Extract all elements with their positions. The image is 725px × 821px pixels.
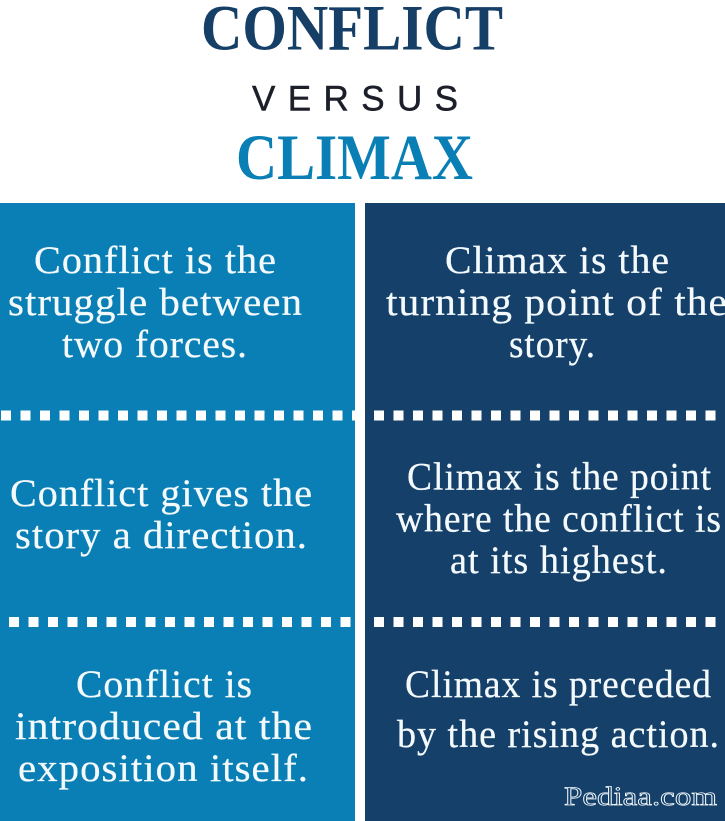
text: conflict row 3: [15, 663, 313, 790]
text: conflict row 1: two forces.: [62, 323, 248, 366]
text: conflict row 2: Conflict gives the: [10, 472, 313, 515]
text: climax row 2: Climax is the point: [407, 456, 712, 498]
text: conflict row 1: Conflict is the: [34, 239, 277, 282]
divider: left upper dotted line: [0, 410, 355, 420]
text: conflict row 1: struggle between: [8, 281, 303, 324]
text: conflict row 3: Conflict is: [76, 663, 253, 706]
text: climax row 1: story.: [509, 323, 596, 366]
text: climax row 2: [396, 456, 722, 582]
logo: Pediaa.com: Pediaa.com: [564, 782, 717, 811]
text: climax row 1: Climax is the: [445, 239, 670, 282]
text: climax row 1: turning point of the: [386, 281, 725, 324]
title: Climax: CLIMAX: [236, 122, 473, 194]
text: conflict row 1: [8, 239, 303, 366]
text: climax row 3: by the rising action.: [397, 713, 720, 756]
text: conflict row 3: introduced at the: [15, 705, 313, 748]
text: conflict row 2: story a direction.: [15, 514, 308, 557]
heading: versus: VERSUS: [252, 80, 458, 118]
divider: left lower dotted line: [0, 617, 355, 627]
text: conflict row 3: exposition itself.: [18, 747, 309, 790]
divider: right upper dotted line: [365, 410, 725, 420]
text: climax row 1: [386, 239, 725, 366]
text: conflict row 2: [10, 472, 313, 557]
text: climax row 2: at its highest.: [450, 539, 668, 582]
panel: climax column: [365, 203, 725, 821]
divider: right lower dotted line: [365, 617, 725, 627]
text: climax row 3: Climax is preceded: [405, 663, 712, 706]
panel: conflict column: [0, 203, 355, 821]
text: climax row 3: [397, 663, 720, 756]
text: climax row 2: where the conflict is: [396, 498, 722, 540]
